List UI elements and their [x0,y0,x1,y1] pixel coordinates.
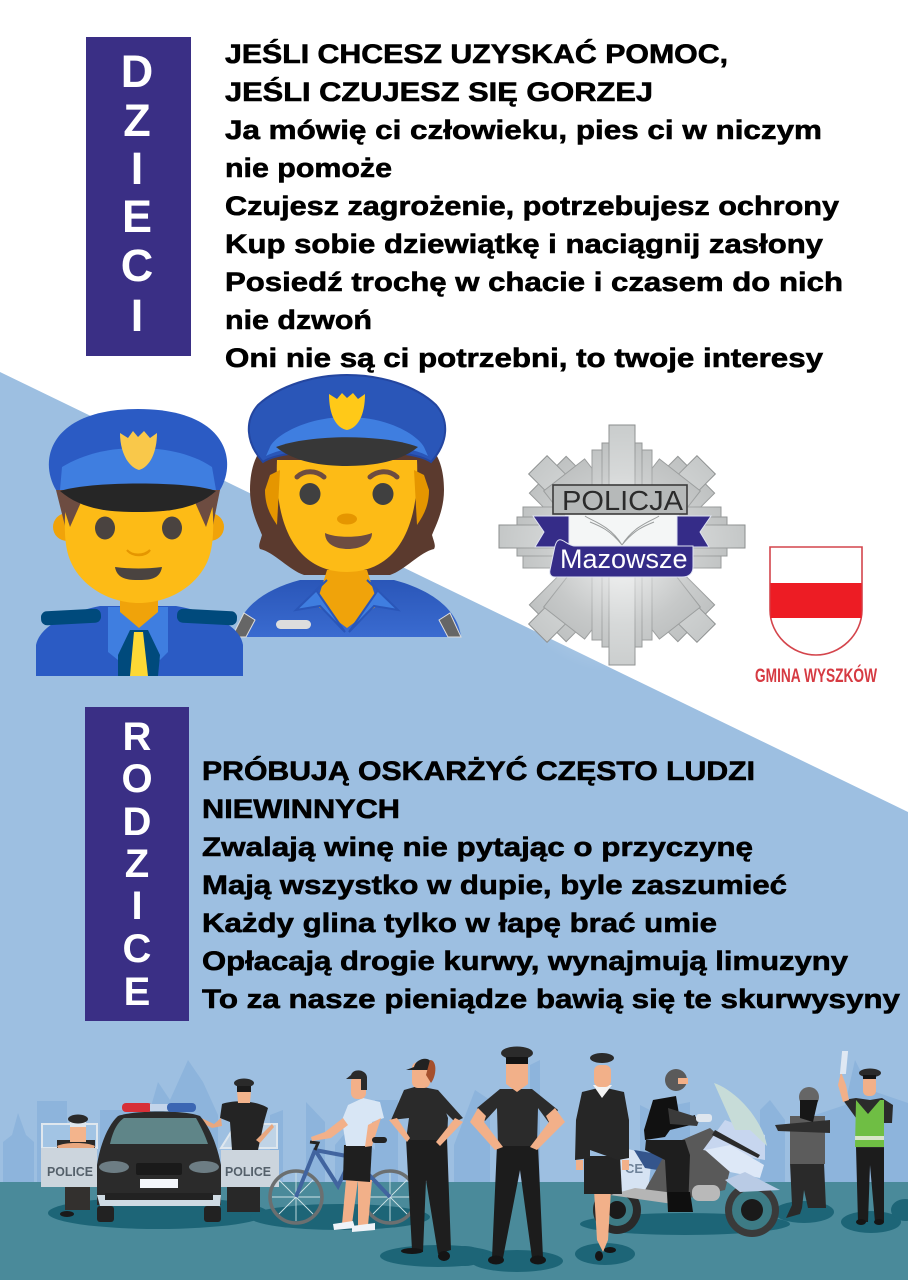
panel: purple bar DZIECI [86,37,191,356]
text block: first verse: Czujesz zagrożenie, potrzebujesz ochrony [225,191,839,221]
panel: purple bar RODZICE: R [123,715,152,759]
panel: purple bar DZIECI: C [121,240,153,291]
background: diagonal blue area [0,372,908,1280]
panel: purple bar DZIECI: I [131,290,143,341]
police car: POLICE [225,1164,271,1179]
illustration: police street scene [0,1046,908,1280]
panel: purple bar RODZICE: I [131,884,143,928]
text block: first verse: Kup sobie dziewiątkę i naciągnij zasłony [225,229,823,259]
text block: first verse [225,39,843,373]
text block: first verse: Posiedź trochę w chacie i czasem do nich [225,267,843,297]
text block: first verse: nie pomoże [225,153,392,183]
panel: purple bar DZIECI: D [121,46,153,97]
text block: first verse: Oni nie są ci potrzebni, to twoje interesy [225,343,823,373]
text block: first verse: JEŚLI CHCESZ UZYSKAĆ POMOC, [225,39,728,69]
riot officer [775,1087,830,1218]
cop standing behind right door [193,1078,274,1212]
text block: second verse: Każdy glina tylko w łapę brać umie [202,908,717,938]
text block: second verse: NIEWINNYCH [202,794,400,824]
police car [41,1103,279,1222]
icon: Gmina Wyszków coat of arms [755,547,877,687]
motorcycle with rider [593,1069,780,1237]
text block: first verse: Ja mówię ci człowieku, pies ci w niczym [225,115,822,145]
panel: purple bar RODZICE: Z [125,842,149,886]
text block: second verse: To za nasze pieniądze bawią się te skurwysyny [202,984,900,1014]
panel: purple bar DZIECI: Z [123,95,151,146]
car door windows [42,1124,277,1148]
panel: purple bar RODZICE: E [124,970,150,1014]
cop kneeling behind left door [57,1114,95,1217]
text block: first verse: JEŚLI CZUJESZ SIĘ GORZEJ [225,77,653,107]
text block: second verse [202,756,900,1014]
badge ribbon Mazowsze: Mazowsze [560,544,688,574]
text block: second verse: PRÓBUJĄ OSKARŻYĆ CZĘSTO LUDZI [202,756,755,786]
panel: purple bar DZIECI: E [122,191,152,242]
icon: policeman emoji [36,409,243,676]
icon: policewoman emoji [232,375,461,637]
panel: purple bar DZIECI: I [131,143,143,194]
motorcycle with rider: CE [625,1161,643,1176]
text block: second verse: Zwalają winę nie pytając o przyczynę [202,832,753,862]
icon: police star badge [495,420,749,670]
bike officer [311,1070,387,1232]
ground shadows [48,1197,908,1272]
ground [0,1182,908,1280]
text block: second verse: Mają wszystko w dupie, byle zaszumieć [202,870,787,900]
female officer in dress uniform [575,1053,629,1261]
bicycle [270,1142,416,1223]
text block: second verse: Opłacają drogie kurwy, wynajmują limuzyny [202,946,848,976]
police car: POLICE [47,1164,93,1179]
panel: purple bar RODZICE [85,707,189,1021]
male officer centre [470,1046,565,1264]
traffic officer [838,1052,893,1225]
panel: purple bar RODZICE: O [121,757,153,801]
female officer [389,1059,463,1261]
panel: purple bar RODZICE: C [123,927,151,971]
panel: purple bar RODZICE: D [123,800,151,844]
city skyline [3,1060,908,1182]
text block: first verse: nie dzwoń [225,305,372,335]
badge text plate POLICJA: POLICJA [562,485,683,516]
